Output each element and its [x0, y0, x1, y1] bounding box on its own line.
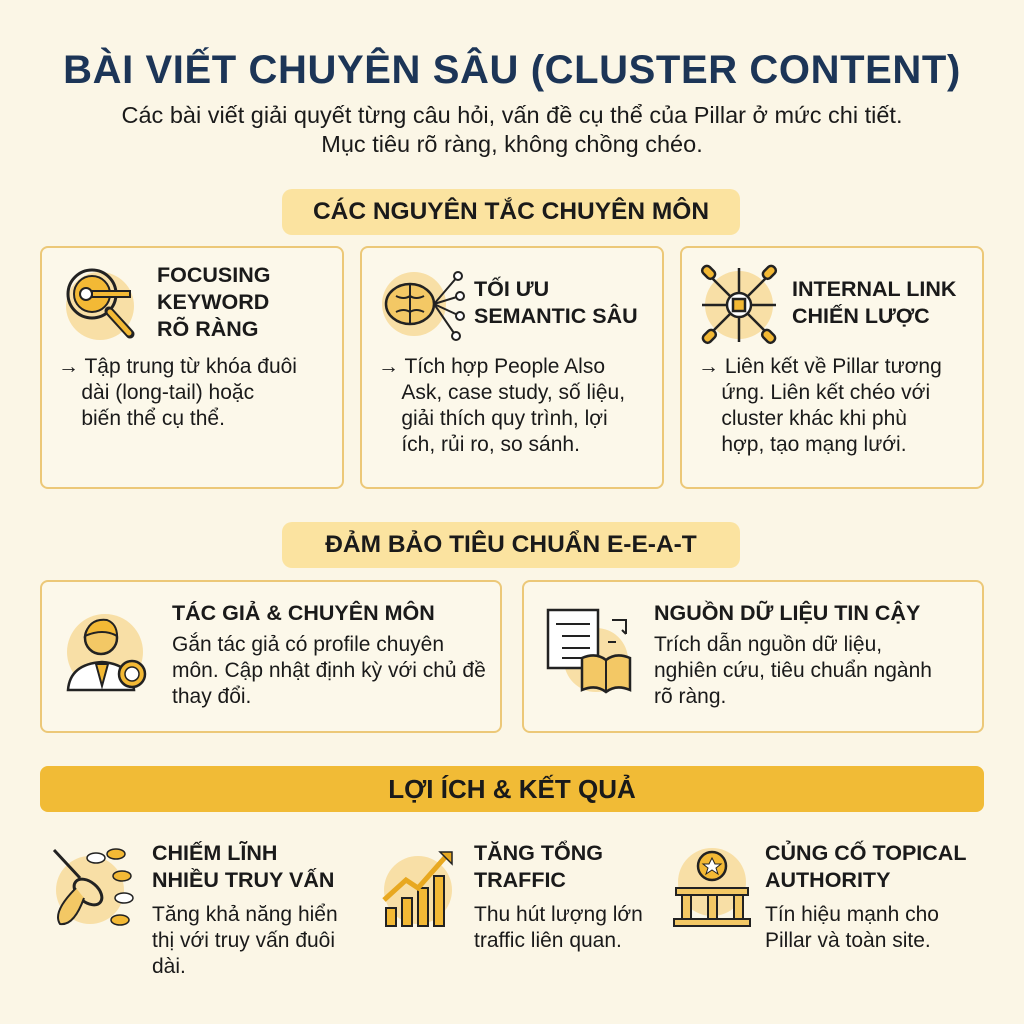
text: dài (long-tail) hoặc	[81, 381, 254, 404]
text: cluster khác khi phù	[721, 407, 907, 430]
text	[698, 355, 942, 456]
icon: medal pillars	[673, 848, 751, 927]
icon: link hub	[700, 264, 778, 344]
text: Gắn tác giả có profile chuyên môn. Cập nhật định kỳ với chủ đề thay đổi.	[172, 633, 486, 708]
benefit: authority	[673, 840, 966, 952]
heading	[152, 841, 334, 892]
heading: TĂNG TỔNG	[474, 841, 603, 865]
heading: TỐI ƯU	[474, 277, 549, 301]
heading: TRAFFIC	[474, 868, 566, 892]
heading	[765, 840, 966, 892]
subtitle: Các bài viết giải quyết từng câu hỏi, vấn đề cụ thể của Pillar ở mức chi tiết.	[122, 102, 902, 128]
text: → Liên kết về Pillar tương	[698, 355, 942, 378]
text	[378, 355, 625, 456]
heading: AUTHORITY	[765, 868, 890, 892]
text: ứng. Liên kết chéo với	[721, 381, 930, 404]
heading: CHIẾM LĨNH	[152, 841, 277, 865]
heading: RÕ RÀNG	[157, 317, 259, 341]
text: biến thể cụ thể.	[81, 407, 225, 430]
section heading: principles	[282, 189, 740, 235]
icon: brain network	[382, 271, 465, 341]
panel: author	[40, 580, 502, 733]
text	[58, 355, 297, 430]
heading	[474, 276, 638, 328]
text: Tín hiệu mạnh cho Pillar và toàn site.	[765, 903, 939, 952]
heading: NHIỀU TRUY VẤN	[152, 868, 334, 892]
heading: KEYWORD	[157, 290, 269, 314]
panel: internal link	[680, 246, 984, 489]
text: Tăng khả năng hiển thị với truy vấn đuôi dài.	[152, 903, 338, 978]
icon: documents book	[546, 608, 632, 694]
text: → Tích hợp People Also	[378, 355, 605, 378]
text: giải thích quy trình, lợi	[401, 407, 608, 430]
heading: CHIẾN LƯỢC	[792, 304, 930, 328]
heading: TÁC GIẢ & CHUYÊN MÔN	[172, 601, 435, 625]
panel: focusing keyword	[40, 246, 344, 489]
text: ích, rủi ro, so sánh.	[401, 433, 580, 456]
section banner: benefits: LỢI ÍCH & KẾT QUẢ	[388, 774, 636, 804]
heading: FOCUSING	[157, 263, 270, 287]
heading	[792, 277, 956, 328]
heading: NGUỒN DỮ LIỆU TIN CẬY	[654, 601, 920, 625]
text: Trích dẫn nguồn dữ liệu,	[654, 633, 882, 656]
section heading: E-E-A-T: ĐẢM BẢO TIÊU CHUẨN E-E-A-T	[325, 531, 697, 558]
icon: growth chart	[382, 851, 453, 927]
benefit: traffic	[382, 840, 643, 952]
heading: CỦNG CỐ TOPICAL	[765, 841, 966, 865]
text: Thu hút lượng lớn traffic liên quan.	[474, 903, 643, 952]
icon: fishing net	[53, 848, 134, 926]
panel: semantic	[360, 246, 664, 489]
text: → Tập trung từ khóa đuôi	[58, 355, 297, 378]
text: nghiên cứu, tiêu chuẩn ngành	[654, 659, 932, 682]
heading	[157, 263, 270, 341]
title: BÀI VIẾT CHUYÊN SÂU (CLUSTER CONTENT)	[63, 48, 961, 92]
text: rõ ràng.	[654, 685, 726, 708]
subtitle: Mục tiêu rõ ràng, không chồng chéo.	[321, 131, 703, 157]
section banner: benefits	[40, 766, 984, 812]
text	[654, 632, 932, 708]
text: hợp, tạo mạng lưới.	[721, 433, 907, 456]
icon: key magnifier	[66, 268, 134, 340]
section heading: principles: CÁC NGUYÊN TẮC CHUYÊN MÔN	[313, 198, 709, 225]
icon: author badge	[66, 614, 146, 692]
heading: INTERNAL LINK	[792, 277, 956, 301]
benefit: queries	[53, 841, 338, 978]
section heading: E-E-A-T	[282, 522, 740, 568]
subtitle	[122, 102, 902, 157]
panel: data sources	[522, 580, 984, 733]
heading: SEMANTIC SÂU	[474, 304, 638, 328]
heading	[474, 840, 603, 892]
text: Ask, case study, số liệu,	[401, 381, 625, 404]
